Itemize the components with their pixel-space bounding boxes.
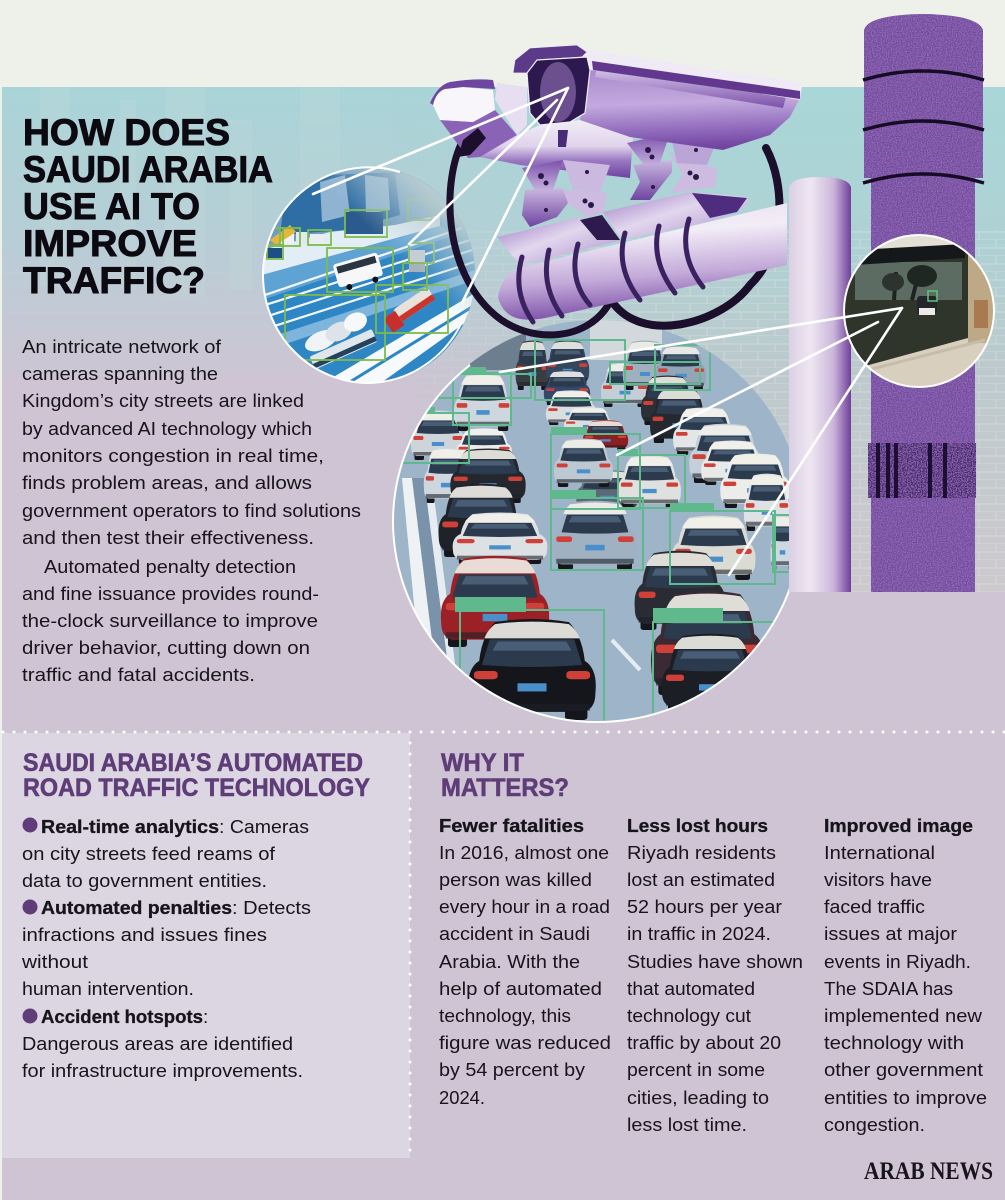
column: improved image xyxy=(824,815,987,1135)
background: brick street texture, right side xyxy=(486,87,1005,592)
column: improved image: faced traffic xyxy=(824,896,925,917)
column: less lost hours: Less lost hours xyxy=(627,815,768,836)
list: technology items: : Detects xyxy=(232,897,311,918)
column: less lost hours: less lost time. xyxy=(627,1114,747,1135)
column: fewer fatalities: 2024. xyxy=(439,1087,485,1108)
column: improved image: The SDAIA has xyxy=(824,978,953,999)
title: USE AI TO xyxy=(23,186,200,227)
photo circle: traffic jam with detection boxes xyxy=(390,318,795,724)
list: technology items: without xyxy=(21,951,89,972)
column: improved image: other government xyxy=(824,1059,984,1080)
bracket legs xyxy=(522,188,568,227)
list: technology items: Real-time analytics xyxy=(41,816,219,837)
intro text block: government operators to find solutions xyxy=(22,500,361,521)
intro text block xyxy=(22,336,361,685)
list: technology items: : xyxy=(203,1006,208,1027)
intro text block: Kingdom’s city streets are linked xyxy=(22,390,304,411)
column: improved image: International xyxy=(824,842,935,863)
list: technology items: Dangerous areas are identified xyxy=(22,1033,293,1054)
column: less lost hours: cities, leading to xyxy=(627,1087,769,1108)
column: improved image: entities to improve xyxy=(824,1087,987,1108)
column: fewer fatalities: accident in Saudi xyxy=(439,923,590,944)
column: less lost hours: in traffic in 2024. xyxy=(627,923,771,944)
column: fewer fatalities: help of automated xyxy=(439,978,602,999)
list: technology items: for infrastructure improvements. xyxy=(22,1060,303,1081)
column: improved image: implemented new xyxy=(824,1005,982,1026)
list: technology items: data to government entities. xyxy=(22,870,267,891)
column: fewer fatalities: In 2016, almost one xyxy=(439,842,609,863)
camera visor xyxy=(513,45,587,73)
camera lens xyxy=(540,62,576,122)
title: SAUDI ARABIA xyxy=(23,149,273,190)
column: improved image: Improved image xyxy=(824,815,973,836)
clamps xyxy=(519,219,703,322)
list: technology items: human intervention. xyxy=(22,978,194,999)
intro text block: finds problem areas, and allows xyxy=(22,472,312,493)
list: technology items: : Cameras xyxy=(219,816,309,837)
camera lid xyxy=(587,50,803,100)
column: fewer fatalities: by 54 percent by xyxy=(439,1059,586,1080)
mounting arm xyxy=(498,203,787,320)
column: fewer fatalities: Arabia. With the xyxy=(439,951,580,972)
heading: technology panel: SAUDI ARABIA’S AUTOMATED xyxy=(23,749,363,777)
column: fewer fatalities: person was killed xyxy=(439,869,592,890)
saddle plates xyxy=(497,217,622,265)
title xyxy=(23,112,273,301)
column: fewer fatalities xyxy=(439,815,611,1108)
photo circle outline: monitor xyxy=(844,235,994,387)
heading: technology panel: ROAD TRAFFIC TECHNOLOGY xyxy=(23,774,370,802)
heading: technology panel xyxy=(23,749,370,802)
column: less lost hours xyxy=(627,815,803,1135)
column: improved image: technology with xyxy=(824,1032,964,1053)
intro text block: cameras spanning the xyxy=(22,363,218,384)
column: less lost hours: Riyadh residents xyxy=(627,842,776,863)
list: technology items: on city streets feed reams of xyxy=(22,843,276,864)
intro text block: An intricate network of xyxy=(22,336,222,357)
detection boxes: traffic xyxy=(402,340,793,722)
photo circle: highway with detection boxes xyxy=(260,165,482,385)
column: less lost hours: lost an estimated xyxy=(627,869,775,890)
photo circle outline: traffic xyxy=(393,365,790,722)
list: technology items: Automated penalties xyxy=(41,897,232,918)
pillar: purple textured column xyxy=(863,14,984,592)
column: improved image: events in Riyadh. xyxy=(824,951,971,972)
rear dome camera xyxy=(495,83,527,135)
intro text block: and then test their effectiveness. xyxy=(22,527,314,548)
camera lens frame xyxy=(527,57,590,125)
column: improved image: issues at major xyxy=(824,923,957,944)
title: HOW DOES xyxy=(23,112,230,153)
column: less lost hours: technology cut xyxy=(627,1005,752,1026)
intro text block: the-clock surveillance to improve xyxy=(22,610,318,631)
heading: why it matters: WHY IT xyxy=(441,749,524,777)
column: less lost hours: that automated xyxy=(627,978,755,999)
column: improved image: congestion. xyxy=(824,1114,925,1135)
photo circle outline: highway xyxy=(263,167,462,383)
cables: black camera cables xyxy=(450,140,779,335)
intro text block: by advanced AI technology which xyxy=(22,418,312,439)
column: improved image: visitors have xyxy=(824,869,932,890)
intro text block: Automated penalty detection xyxy=(44,556,296,577)
column: less lost hours: Studies have shown xyxy=(627,951,803,972)
list: technology items xyxy=(21,816,311,1081)
heading: why it matters xyxy=(441,749,569,802)
column: less lost hours: 52 hours per year xyxy=(627,896,782,917)
list: technology items: Accident hotspots xyxy=(41,1006,203,1027)
column: less lost hours: percent in some xyxy=(627,1059,765,1080)
title: IMPROVE xyxy=(23,223,197,264)
under block xyxy=(480,120,633,178)
pole: vertical lilac post xyxy=(789,177,851,592)
intro text block: driver behavior, cutting down on xyxy=(22,637,310,658)
camera assembly xyxy=(430,45,803,322)
intro text block: traffic and fatal accidents. xyxy=(22,664,255,685)
background: pale top band xyxy=(0,0,1005,87)
column: less lost hours: traffic by about 20 xyxy=(627,1032,781,1053)
column: fewer fatalities: every hour in a road xyxy=(439,896,610,917)
column: fewer fatalities: technology, this xyxy=(439,1005,571,1026)
intro text block: monitors congestion in real time, xyxy=(22,445,324,466)
photo circle: roadside monitor xyxy=(845,236,993,386)
title: TRAFFIC? xyxy=(23,260,205,301)
background: teal to lilac gradient with faint city xyxy=(2,87,562,387)
connector lines: camera to photo circles xyxy=(313,88,902,575)
panel: automated road traffic technology xyxy=(2,733,410,1158)
column: fewer fatalities: Fewer fatalities xyxy=(439,815,584,836)
column: fewer fatalities: figure was reduced xyxy=(439,1032,611,1053)
camera body xyxy=(580,70,800,150)
bracket plates xyxy=(522,160,563,190)
heading: why it matters: MATTERS? xyxy=(441,774,569,802)
intro text block: and fine issuance provides round- xyxy=(22,583,319,604)
list: technology items: infractions and issues fines xyxy=(22,924,267,945)
